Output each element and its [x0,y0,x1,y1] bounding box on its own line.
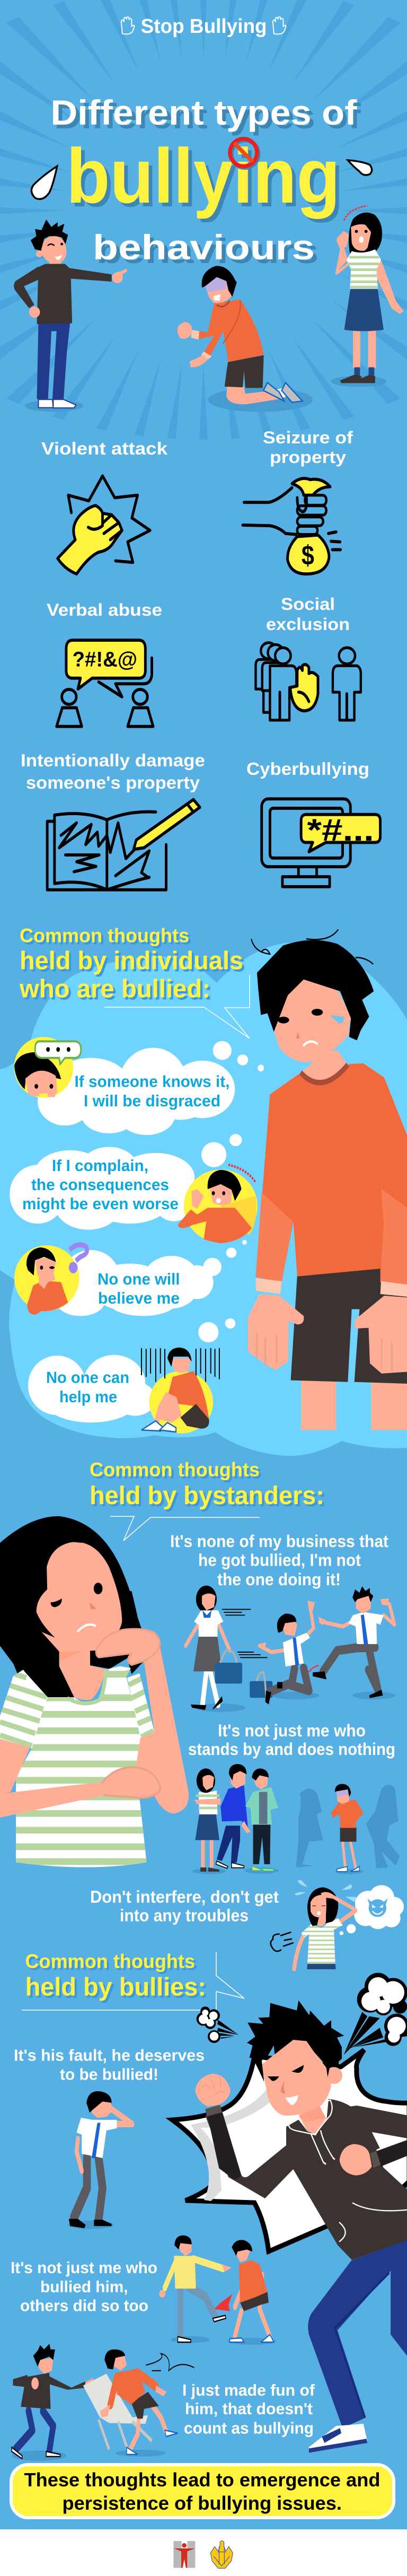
label: social exclusion: Social [281,595,335,614]
thought 1 text: the one doing it! [217,1570,341,1589]
thought 3 text: him, that doesn't [185,2399,313,2418]
thought 1 text: to be bullied! [60,2065,158,2083]
thought cloud 4 text: No one can [46,1368,129,1386]
figure: large sad boy [248,929,407,1430]
scene: girl walks past a kicking bully [185,1586,395,1712]
arms and hands [0,1629,189,1818]
legs and shoe [308,2240,407,2453]
thought 3 text: I just made fun of [182,2381,315,2399]
thought cloud 1 text: If someone knows it, [74,1072,230,1090]
scene: boy in yellow kicks a boy [159,2236,277,2345]
label: violent attack: Violent attack [41,439,168,458]
thought cloud 3 text: believe me [98,1289,180,1307]
puff of air [271,1932,293,1951]
thought 3 text: count as bullying [184,2418,314,2438]
scene: group of onlookers [192,1764,400,1874]
thought 2 text: stands by and does nothing [188,1740,395,1759]
hair body, neck and shirt [0,1591,155,1868]
figure: kneeling victim [178,266,313,412]
angry puffs [343,2012,388,2055]
thought cloud 1 text: I will be disgraced [84,1091,220,1110]
title line 3: behaviours [93,228,315,267]
thought cloud 4 with sitting boy [28,1318,235,1434]
comic burst [172,2050,407,2251]
title [51,93,358,267]
thought 2 text: others did so too [20,2296,148,2315]
thought cloud 3 with doubtful boy [14,1245,222,1316]
heading [90,1459,324,1510]
icon: computer with abusive message [262,799,381,887]
thought cloud 2 with startled boy [10,1134,258,1258]
label: cyberbullying: Cyberbullying [246,759,369,779]
figure: bully pointing [14,220,127,412]
thought 3 text: Don't interfere, don't get [90,1888,279,1907]
figure: large angry bully [172,1973,407,2453]
panel: types of bullying [21,428,381,890]
thought 3 text: into any troubles [120,1906,249,1925]
icon: verbal abuse speech bubbles: ?#!&@ [73,648,137,671]
conclusion box [11,2465,394,2518]
icon: money bag: $ [302,540,314,571]
icon: verbal abuse speech bubbles [57,640,153,727]
callout pointer line [110,1516,260,1541]
title line 2: bullying: bullying [66,133,340,219]
figure: large thinking girl [0,1516,189,1868]
figure: nervous girl with devil thought [271,1880,404,1969]
thought 1 text: It's his fault, he deserves [14,2046,205,2064]
thought 2 text: It's not just me who [11,2258,157,2277]
thought cloud 2 text: the consequences [31,1175,169,1194]
panel: types of bullying: someone's property [26,773,200,792]
label: verbal abuse: Verbal abuse [47,600,162,619]
thought 3 text [90,1888,279,1925]
icon: computer with abusive message: *#... [307,813,374,848]
thought 1 text: he got bullied, I'm not [198,1551,361,1570]
thought 2 text: bullied him, [40,2277,128,2296]
heading: held by bystanders: [90,1482,324,1510]
panel: thoughts of bullies [11,1951,407,2461]
figure: shocked girl [331,206,404,387]
hair top and face [0,1516,132,1599]
thought 1 text [14,2046,205,2083]
icon: money bag [243,478,341,574]
panel: thoughts of bullied individuals [0,925,407,1456]
thought cloud 3 text [98,1270,180,1307]
thought 1 text [170,1532,388,1589]
panel: types of bullying: exclusion [266,615,350,634]
thought cloud 2 text: If I complain, [52,1156,148,1175]
logo: social welfare department [173,2541,195,2568]
face [37,1536,122,1652]
fists [195,2074,231,2107]
girl body [294,1880,357,1969]
icon: right hand [273,17,286,34]
heading [25,1951,206,2002]
icon: social exclusion people and hand [255,643,361,720]
scene: crying boy [68,2091,132,2229]
header: stop bullying [121,15,286,38]
icon: damaged book and pencil [47,800,200,890]
thought cloud 3 text: No one will [98,1270,180,1288]
conclusion box: These thoughts lead to emergence and [24,2469,381,2491]
thought 2 text [11,2258,157,2315]
icon: left hand [121,17,135,34]
thought 3 text [182,2381,315,2438]
thought cloud 1 text [74,1072,230,1110]
devil thought cloud [340,1885,404,1935]
scene: bully pulling chair [12,2344,194,2461]
heading: who are bullied: [19,975,210,1003]
label: seizure of property: Seizure of [263,428,353,447]
stop bullying label: Stop Bullying [141,15,267,38]
thought 1 text: It's none of my business that [170,1532,388,1551]
thought cloud 4 text: help me [59,1387,117,1406]
thought cloud 2 text [22,1156,179,1213]
footer [0,2529,407,2576]
hoodie [205,2099,407,2260]
heading: held by individuals [20,947,243,975]
heading: Common thoughts [90,1459,260,1481]
hood and neck [298,2105,326,2135]
light cloud background [0,943,407,1456]
panel: types of bullying: property [270,448,346,467]
upper body [195,1973,407,2272]
thought 2 text: It's not just me who [218,1721,366,1740]
callout pointer line [104,974,250,1038]
logo: education emblem [210,2540,233,2568]
icon: fist [58,476,150,574]
thought cloud 1 with peeking boy [14,1037,264,1135]
thought cloud 4 text [46,1368,129,1406]
icon: prohibited sign [230,139,259,168]
heading: held by bullies: [25,1974,206,2002]
label: intentionally damage someone's property: Intentionally damage [21,750,205,770]
heading [19,925,243,1003]
panel: thoughts of bystanders [0,1459,404,1969]
title line 1: Different types of [51,93,358,132]
thought cloud 2 text: might be even worse [22,1194,179,1213]
conclusion box: persistence of bullying issues. [63,2492,342,2514]
heading: Common thoughts [20,925,189,946]
icon: sweat drops [31,160,372,199]
heading: Common thoughts [25,1951,195,1972]
callout pointer line [22,1952,244,2010]
head [325,2067,342,2084]
thought 2 text [188,1721,395,1759]
